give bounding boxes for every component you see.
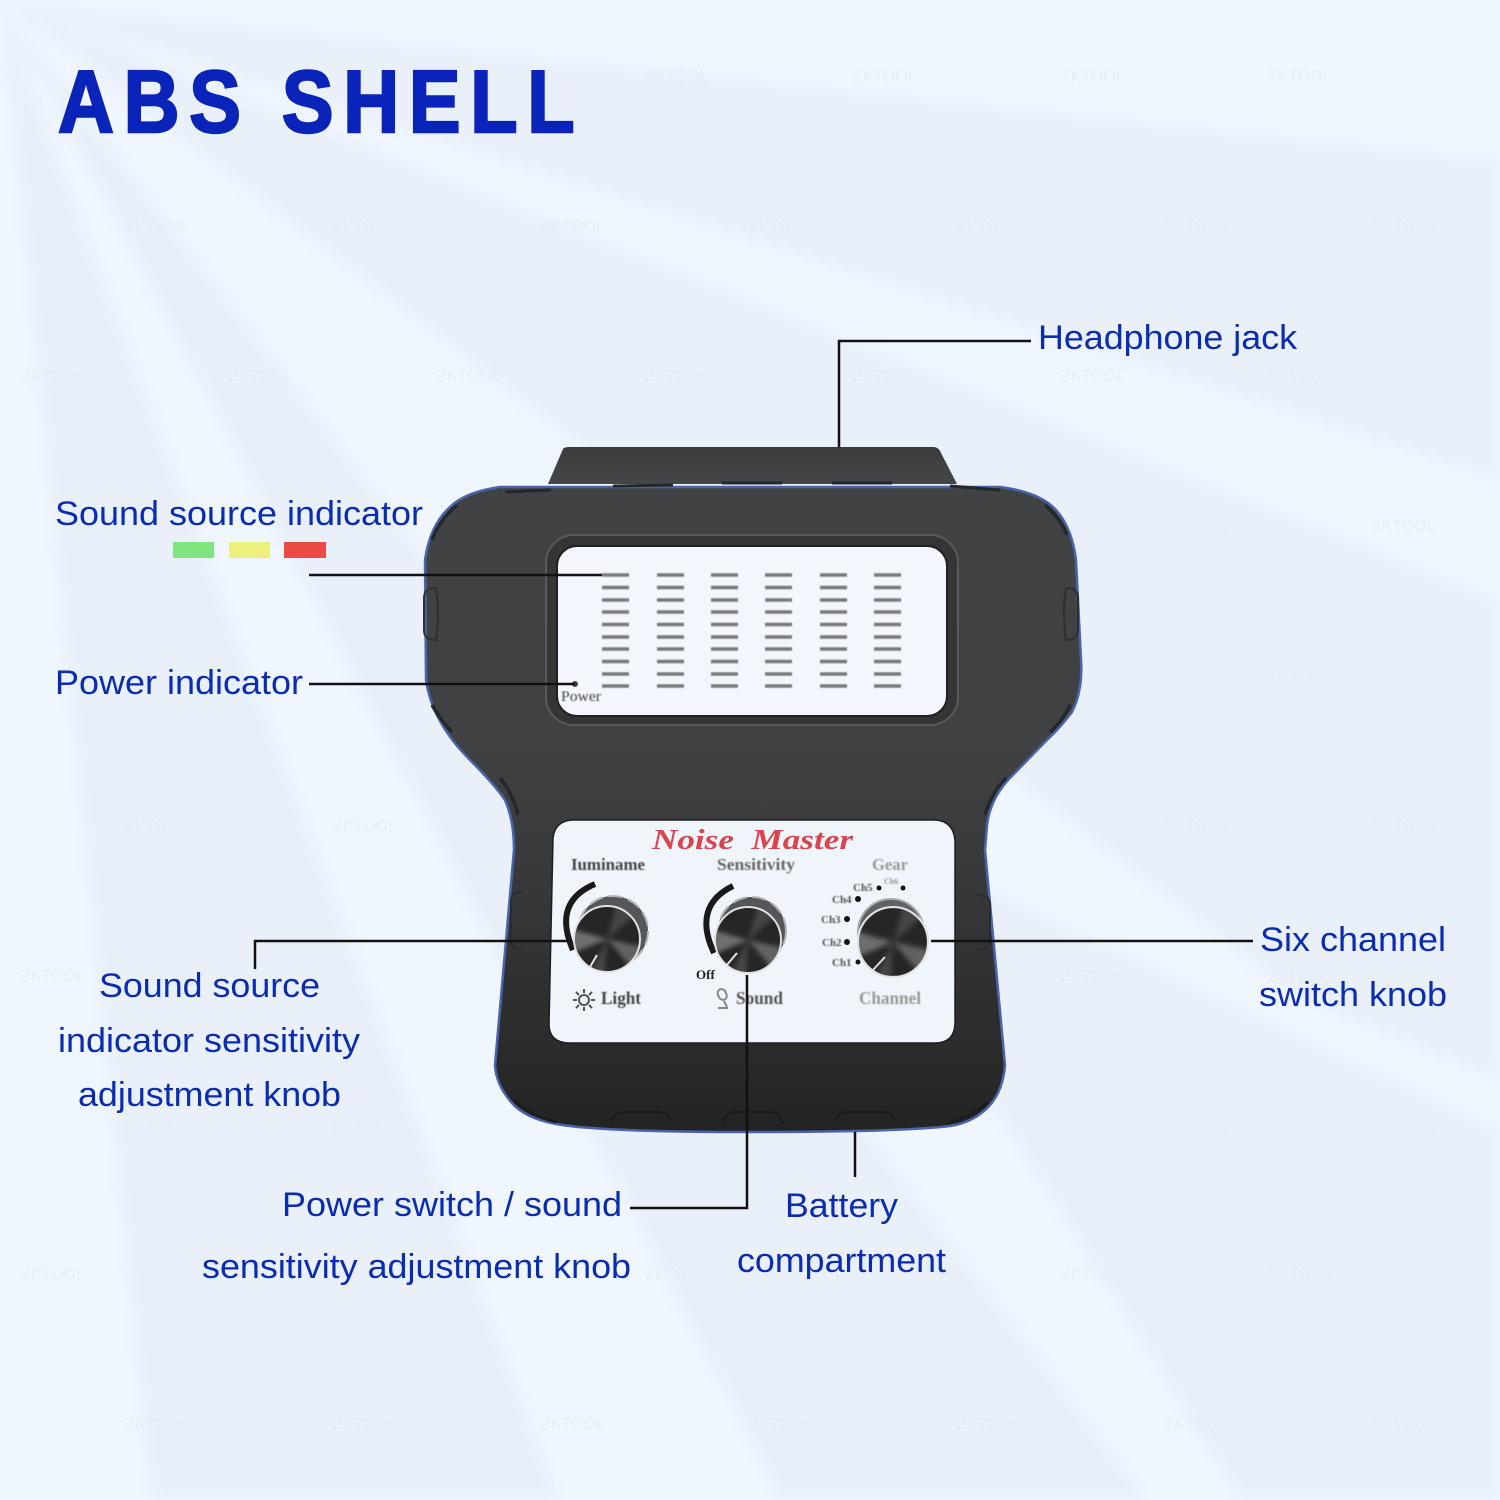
panel headings: Gear (872, 855, 908, 874)
watermarks: ZKTOOL (1268, 68, 1332, 85)
watermarks: ZKTOOL (1372, 218, 1436, 235)
watermarks: ZKTOOL (1164, 218, 1228, 235)
icon: light (573, 989, 595, 1011)
panel headings (571, 855, 908, 874)
label: battery compartment: Battery (785, 1187, 898, 1225)
channel marks (821, 877, 906, 969)
watermarks: ZKTOOL (333, 1118, 397, 1135)
channel marks: Ch5 (853, 882, 873, 894)
knob: luminance (566, 884, 648, 976)
watermarks: ZKTOOL (853, 68, 917, 85)
label: battery compartment (737, 1187, 947, 1280)
power led (572, 681, 578, 687)
label: battery compartment: compartment (737, 1242, 947, 1280)
indicator colour swatches (173, 542, 326, 558)
label: six channel switch knob: Six channel (1260, 921, 1446, 959)
label: sensitivity adjustment knob: adjustment knob (78, 1076, 341, 1114)
icon: sound (716, 988, 728, 1008)
label: sensitivity adjustment knob (58, 967, 360, 1114)
power label: Power (561, 689, 601, 705)
sound label: Sound (736, 988, 783, 1008)
watermarks: ZKTOOL (125, 218, 189, 235)
watermarks: ZKTOOL (125, 1118, 189, 1135)
watermarks: ZKTOOL (21, 368, 85, 385)
panel headings: Sensitivity (717, 855, 796, 874)
label: sensitivity adjustment knob: Sound source (99, 967, 320, 1005)
label: six channel switch knob (1259, 921, 1447, 1014)
channel marks: Ch3 (821, 914, 841, 926)
watermarks: ZKTOOL (1164, 1118, 1228, 1135)
watermarks: ZKTOOL (541, 1416, 605, 1433)
channel marks: Ch2 (822, 937, 842, 949)
watermarks: ZKTOOL (21, 1266, 85, 1283)
label: headphone jack: Headphone jack (1038, 319, 1298, 357)
watermarks: ZKTOOL (333, 218, 397, 235)
watermarks: ZKTOOL (1372, 818, 1436, 835)
label: six channel switch knob: switch knob (1259, 976, 1447, 1014)
channel marks: Ch1 (832, 957, 852, 969)
watermarks: ZKTOOL (437, 368, 501, 385)
watermarks: ZKTOOL (1061, 968, 1125, 985)
watermarks: ZKTOOL (1372, 1118, 1436, 1135)
watermarks: ZKTOOL (125, 818, 189, 835)
watermarks: ZKTOOL (1164, 518, 1228, 535)
device top cap (548, 447, 957, 484)
device shell (425, 487, 1081, 1132)
channel label: Channel (859, 988, 921, 1008)
watermarks: ZKTOOL (1164, 818, 1228, 835)
watermarks: ZKTOOL (645, 368, 709, 385)
display window bezel (546, 535, 958, 725)
knob: channel (854, 899, 931, 981)
watermarks: ZKTOOL (333, 1416, 397, 1433)
watermarks: ZKTOOL (1372, 518, 1436, 535)
watermarks: ZKTOOL (1268, 368, 1332, 385)
watermarks: ZKTOOL (1268, 668, 1332, 685)
device: noise master (424, 447, 1081, 1132)
watermarks: ZKTOOL (749, 218, 813, 235)
watermarks: ZKTOOL (957, 1416, 1021, 1433)
watermarks: ZKTOOL (1268, 968, 1332, 985)
watermarks: ZKTOOL (1061, 368, 1125, 385)
off label: Off (696, 967, 715, 982)
label: power switch (202, 1186, 631, 1286)
display window (557, 546, 947, 716)
watermarks: ZKTOOL (645, 1266, 709, 1283)
label: power indicator: Power indicator (55, 664, 303, 702)
watermarks: ZKTOOL (957, 218, 1021, 235)
channel marks: Ch6 (884, 877, 898, 886)
watermarks: ZKTOOL (1061, 68, 1125, 85)
watermarks: ZKTOOL (21, 968, 85, 985)
watermarks: ZKTOOL (645, 68, 709, 85)
light label: Light (601, 988, 641, 1008)
watermarks: ZKTOOL (541, 218, 605, 235)
brand: Noise Master (651, 824, 854, 856)
watermarks: ZKTOOL (1164, 1416, 1228, 1433)
channel marks: Ch4 (832, 894, 852, 906)
leader lines (255, 341, 1253, 1208)
label: sensitivity adjustment knob: indicator sensitivity (58, 1022, 360, 1060)
panel headings: Iuminame (571, 855, 645, 874)
indicator led columns (602, 575, 901, 686)
label: sound source indicator: Sound source indicator (55, 495, 423, 533)
watermarks: ZKTOOL (1268, 1266, 1332, 1283)
label: power switch: Power switch / sound (282, 1186, 622, 1224)
watermarks: ZKTOOL (333, 818, 397, 835)
label: power switch: sensitivity adjustment knob (202, 1248, 631, 1286)
knob: sensitivity (706, 886, 786, 977)
watermarks: ZKTOOL (1061, 1266, 1125, 1283)
watermarks: ZKTOOL (1372, 1416, 1436, 1433)
watermarks: ZKTOOL (229, 368, 293, 385)
watermarks: ZKTOOL (125, 1416, 189, 1433)
control panel (549, 820, 955, 1043)
title: ABS SHELL (58, 52, 575, 151)
shell clips and edge details (424, 483, 1078, 1124)
watermarks: ZKTOOL (749, 1416, 813, 1433)
watermarks: ZKTOOL (853, 368, 917, 385)
